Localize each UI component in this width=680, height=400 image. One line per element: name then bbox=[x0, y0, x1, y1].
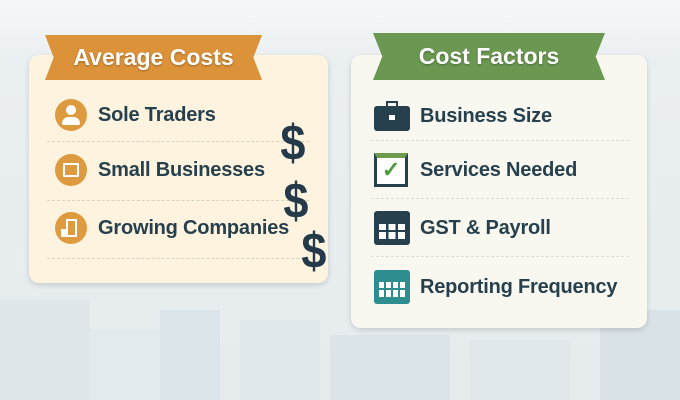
panel: cost factors bbox=[351, 55, 647, 328]
row: sole traders: Sole Traders bbox=[98, 104, 216, 126]
skyline background bbox=[0, 300, 680, 400]
row: reporting frequency: Reporting Frequency bbox=[420, 276, 617, 298]
dollar signs bbox=[280, 115, 326, 279]
row: reporting frequency bbox=[374, 270, 618, 304]
row: services needed: Services Needed bbox=[420, 158, 577, 180]
text: $ bbox=[283, 173, 308, 229]
row: small businesses bbox=[55, 154, 265, 186]
row: business size bbox=[374, 101, 552, 131]
row: gst payroll bbox=[374, 211, 551, 245]
row: growing companies bbox=[55, 212, 289, 244]
row: services needed bbox=[374, 153, 577, 187]
panel: average costs bbox=[29, 55, 328, 283]
ribbon: average costs bbox=[45, 35, 262, 80]
row: business size: Business Size bbox=[420, 104, 552, 126]
ribbon: cost factors: Cost Factors bbox=[419, 43, 559, 69]
text: $ bbox=[280, 115, 305, 171]
row: sole traders bbox=[55, 99, 216, 131]
text: $ bbox=[301, 223, 326, 279]
row: small businesses: Small Businesses bbox=[98, 158, 265, 180]
row: growing companies: Growing Companies bbox=[98, 216, 289, 238]
ribbon: cost factors bbox=[373, 33, 605, 80]
row: gst payroll: GST & Payroll bbox=[420, 216, 551, 238]
row: services needed: ✓ bbox=[382, 157, 400, 182]
ribbon: average costs: Average Costs bbox=[73, 44, 234, 70]
